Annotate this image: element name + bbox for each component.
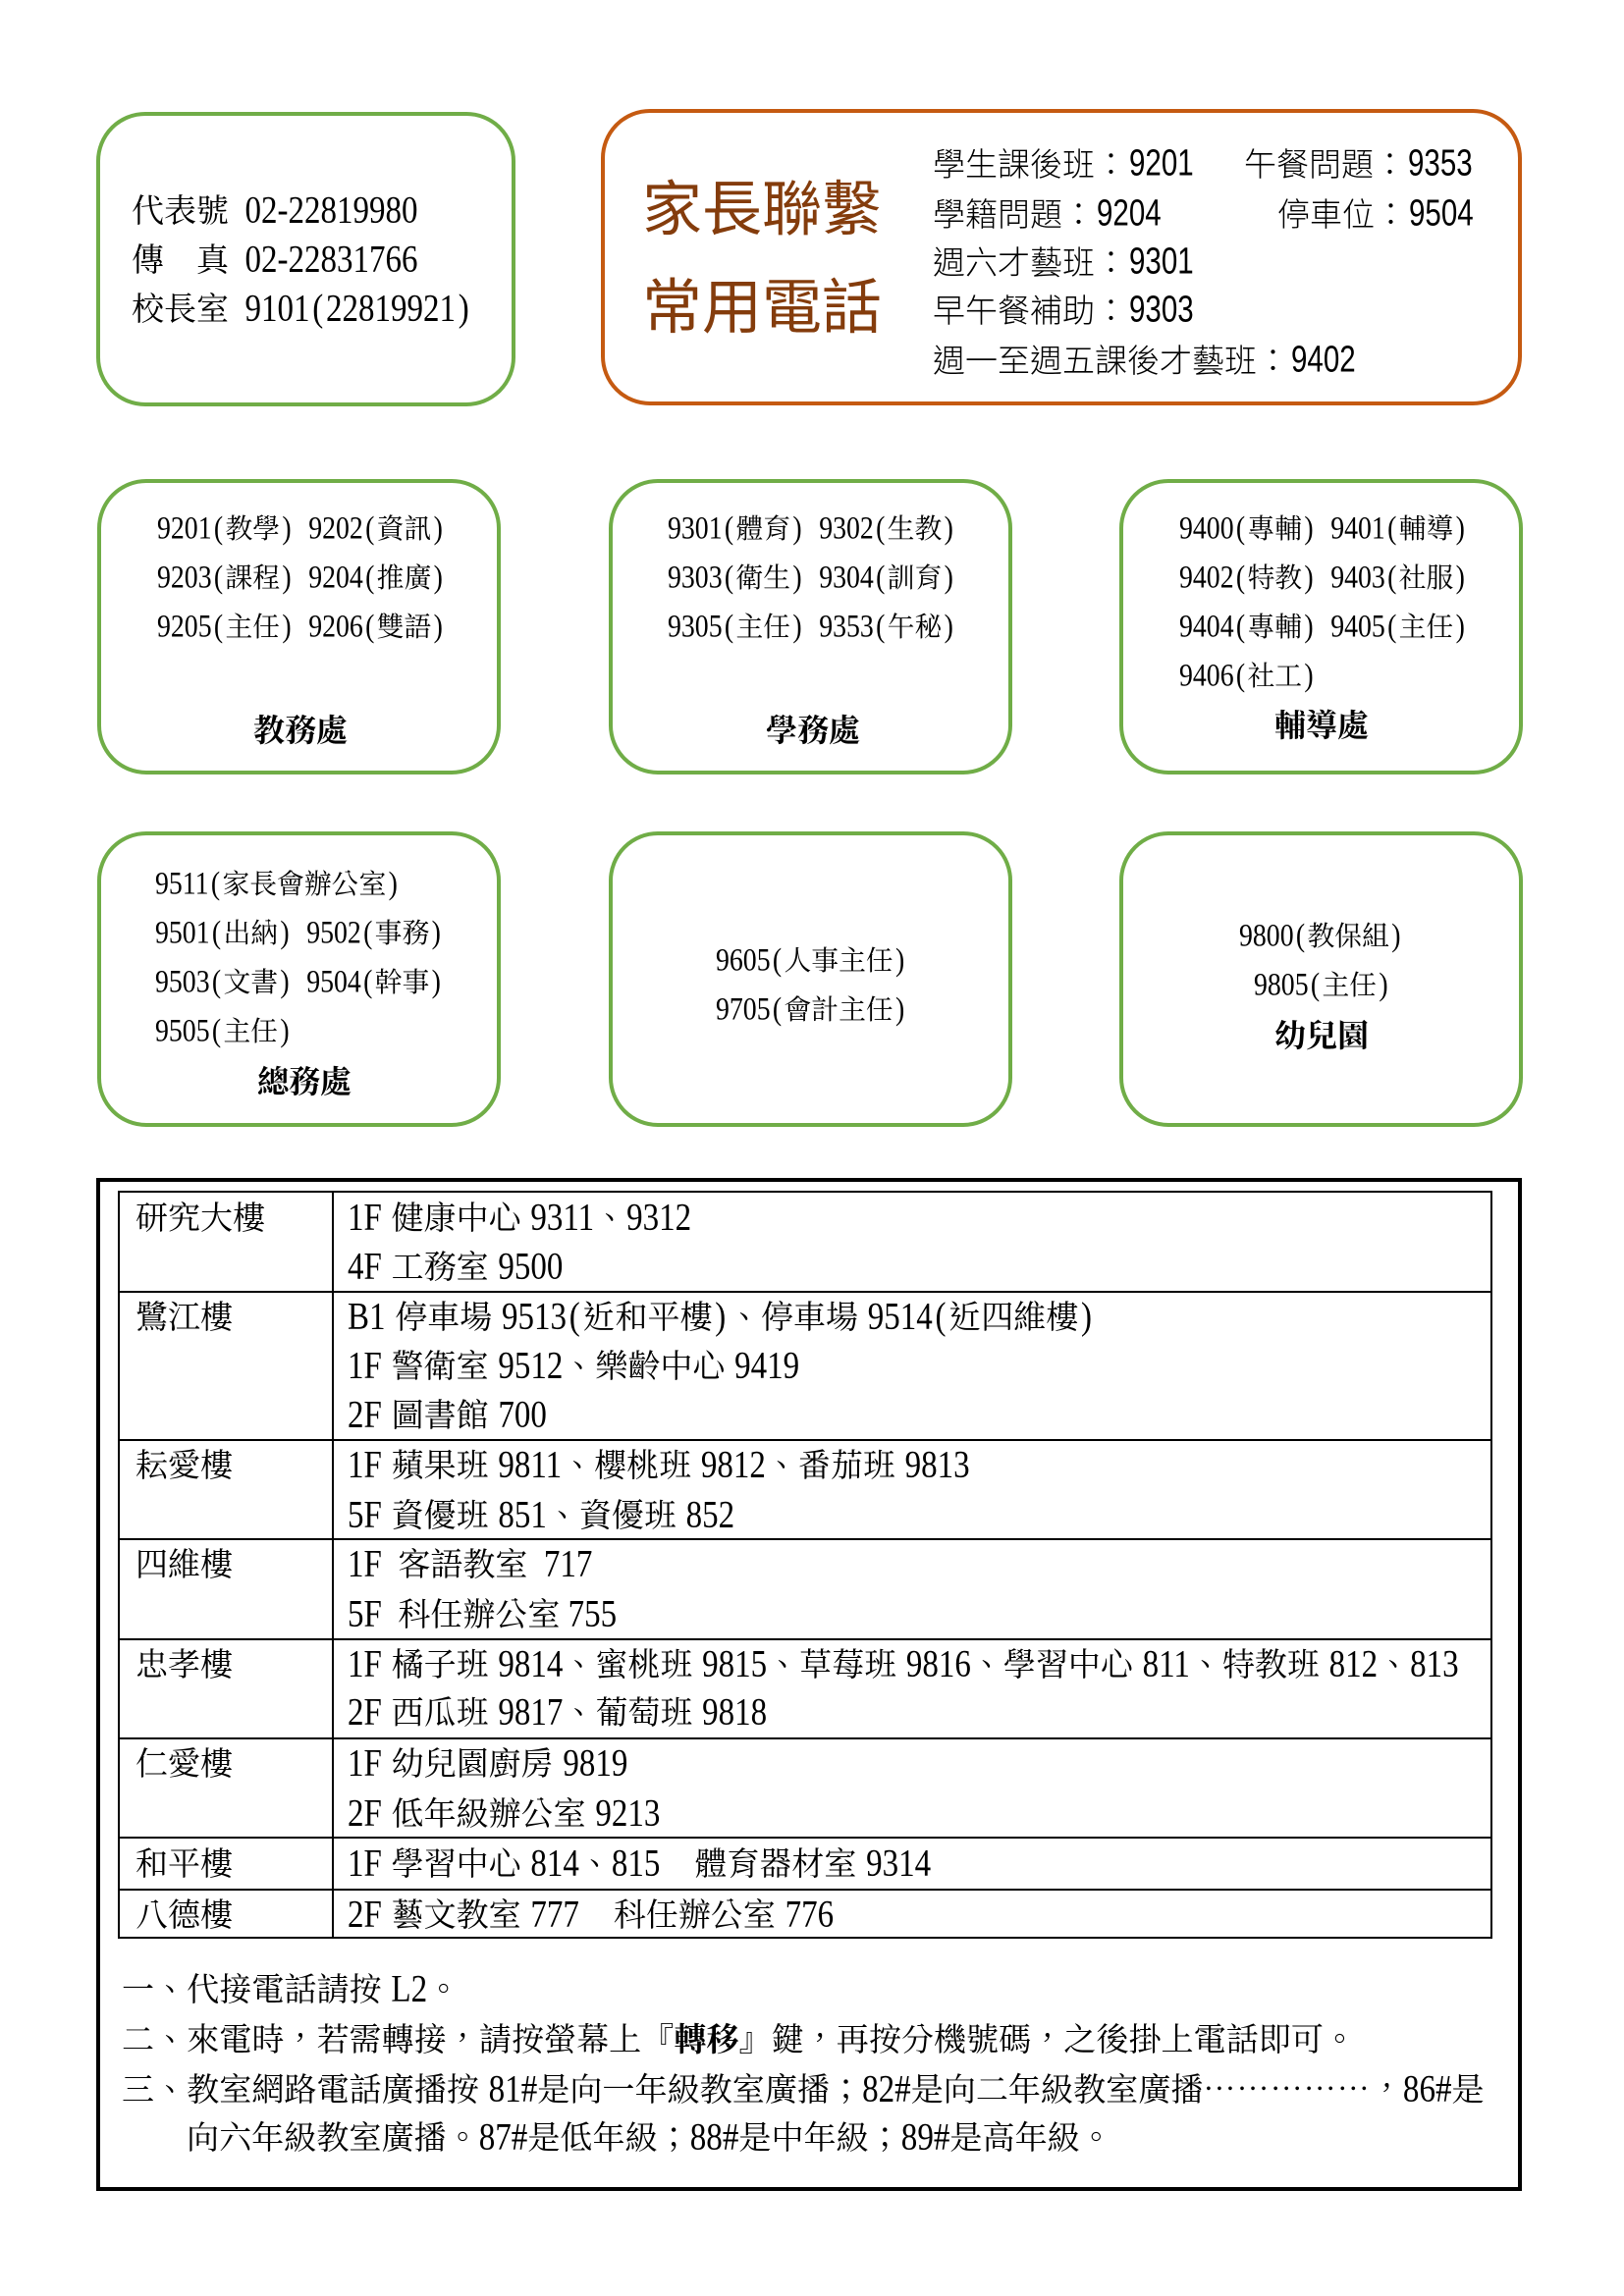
text: extensions line 3: ) bbox=[434, 609, 443, 645]
text: 1F: 1F bbox=[348, 1544, 382, 1585]
text: 4F bbox=[348, 1247, 563, 1288]
row: heping building bbox=[120, 1839, 1490, 1891]
text: extensions line 2 bbox=[1179, 560, 1465, 596]
text: B1: ) bbox=[715, 1297, 726, 1338]
text: extensions line 2: ( bbox=[876, 560, 885, 596]
text: 1F bbox=[348, 1740, 627, 1789]
text: extensions line 4: 9406 bbox=[1179, 658, 1234, 694]
text: saturday arts class bbox=[933, 240, 1194, 283]
text: accounting director: 9705 bbox=[716, 991, 771, 1028]
text: extensions line 1: 9201 bbox=[157, 510, 212, 547]
text: 1F: 學習中心 、 體育器材室 bbox=[392, 1847, 856, 1883]
text: 2F: 9817 bbox=[498, 1692, 563, 1734]
text: 5F: 5F bbox=[348, 1495, 382, 1536]
text: extensions line 1: ( bbox=[725, 510, 733, 547]
text: accounting director bbox=[716, 991, 904, 1028]
text: 1F: 1F bbox=[348, 1346, 382, 1387]
text: childcare team: ( bbox=[1296, 918, 1305, 954]
text: extensions line 1: ) bbox=[389, 866, 398, 902]
text: 1F: 814 bbox=[530, 1843, 579, 1885]
text: extensions line 1: 9302 bbox=[819, 510, 874, 547]
text: extensions line 1: 體育 生教 bbox=[735, 514, 942, 545]
text: extensions line 2: ( bbox=[363, 915, 372, 951]
text: extensions line 1: ( bbox=[365, 510, 374, 547]
text: 5F: 755 bbox=[568, 1594, 617, 1635]
text: extensions line 1: 9511 bbox=[155, 866, 209, 902]
text: extensions line 1: 9301 bbox=[668, 510, 723, 547]
text: 1F: 813 bbox=[1410, 1644, 1459, 1685]
text: principal office: 9101 bbox=[245, 289, 310, 330]
text: extensions line 3: ) bbox=[1456, 609, 1465, 645]
text: extensions line 3: 主任 午秘 bbox=[735, 613, 942, 643]
text: saturday arts class: 週六才藝班： bbox=[933, 244, 1127, 281]
text: 5F: 852 bbox=[686, 1495, 734, 1536]
text: childcare team: 9800 bbox=[1239, 918, 1294, 954]
text: principal office: ) bbox=[459, 289, 469, 330]
text: extensions line 3: 專輔 主任 bbox=[1247, 613, 1453, 643]
text: 2F: 2F bbox=[348, 1692, 382, 1734]
text: extensions line 1: ( bbox=[1236, 510, 1245, 547]
text: extensions line 3 bbox=[1179, 609, 1465, 645]
text: 1F: 1F bbox=[348, 1644, 382, 1685]
heading: counseling: 輔導處 bbox=[1274, 708, 1369, 743]
text: 1F: 幼兒園廚房 bbox=[392, 1747, 554, 1783]
text: personnel director: 人事主任 bbox=[784, 946, 893, 977]
text: 1F: 9819 bbox=[563, 1743, 627, 1785]
heading: common numbers: 常用電話 bbox=[642, 274, 882, 341]
text: extensions line 4: 社工 bbox=[1247, 662, 1302, 692]
text: extensions line 1 bbox=[668, 510, 953, 547]
text: 1F: 812 bbox=[1329, 1644, 1378, 1685]
text: meal subsidy: 9303 bbox=[1129, 289, 1194, 331]
row: bade building bbox=[120, 1891, 1490, 1937]
text: B1: ( bbox=[569, 1297, 580, 1338]
text: note 3 line 1: 82# bbox=[862, 2069, 911, 2110]
text: extensions line 3: ( bbox=[725, 609, 733, 645]
text: fax: 02-22831766 bbox=[245, 240, 418, 281]
text: after-school class: 9201 bbox=[1129, 142, 1194, 185]
text: 2F bbox=[348, 1395, 547, 1436]
text: extensions line 4: 9505 bbox=[155, 1013, 210, 1049]
text: note 3 line 2: 87# bbox=[479, 2117, 527, 2159]
text: main phone bbox=[132, 190, 418, 232]
text: B1: B1 bbox=[348, 1297, 386, 1338]
text: accounting director: ( bbox=[773, 991, 782, 1028]
text: extensions line 4: ( bbox=[1236, 658, 1245, 694]
text: extensions line 1: ) bbox=[434, 510, 443, 547]
row: zhongxiao building bbox=[120, 1640, 1490, 1739]
text: fax: 傳 真 bbox=[132, 243, 229, 279]
text: extensions line 1: 家長會辦公室 bbox=[222, 870, 386, 900]
text: parking: 停車位： bbox=[1277, 196, 1407, 233]
heading: student affairs: 學務處 bbox=[766, 713, 860, 748]
text: 5F bbox=[348, 1594, 617, 1635]
text: 4F: 4F bbox=[348, 1247, 382, 1288]
text: extensions line 3: 9504 bbox=[306, 964, 361, 1000]
text: enrollment issues: 9204 bbox=[1097, 192, 1162, 235]
text: extensions line 2: ) bbox=[1304, 560, 1314, 596]
text: extensions line 1: 9401 bbox=[1330, 510, 1385, 547]
text: extensions line 2: ( bbox=[365, 560, 374, 596]
text: 2F bbox=[348, 1790, 660, 1840]
text: fax bbox=[132, 240, 418, 281]
text: extensions line 3: ) bbox=[432, 964, 441, 1000]
text: personnel director: ) bbox=[895, 942, 904, 979]
text: B1: 9514 bbox=[868, 1297, 933, 1338]
text: 2F: 777 bbox=[530, 1895, 579, 1936]
text: extensions line 4 bbox=[155, 1013, 290, 1049]
text: extensions line 1: ) bbox=[792, 510, 802, 547]
text: extensions line 1: ) bbox=[1304, 510, 1314, 547]
text: 4F: 9500 bbox=[498, 1247, 563, 1288]
text: extensions line 4: ( bbox=[212, 1013, 221, 1049]
text: 1F: 9812 bbox=[701, 1445, 766, 1486]
text: extensions line 3: ) bbox=[282, 609, 292, 645]
text: 1F: 9311 bbox=[530, 1198, 594, 1239]
text: after-school class: 學生課後班： bbox=[933, 146, 1127, 183]
row: research building bbox=[120, 1193, 1490, 1293]
text: extensions line 2 bbox=[155, 915, 441, 951]
text: 5F: 851 bbox=[498, 1495, 547, 1536]
text: 2F: 700 bbox=[498, 1395, 547, 1436]
text: extensions line 3: ( bbox=[212, 964, 221, 1000]
text: extensions line 1: ( bbox=[214, 510, 223, 547]
text: 2F: 藝文教室 科任辦公室 bbox=[392, 1898, 776, 1934]
panel: kindergarten bbox=[1119, 831, 1523, 1127]
text: extensions line 2: ( bbox=[212, 915, 221, 951]
panel: academic affairs bbox=[97, 479, 501, 774]
text: principal office: 22819921 bbox=[326, 289, 456, 330]
label: ren-ai building: 仁愛樓 bbox=[135, 1747, 233, 1783]
text: 2F: 2F bbox=[348, 1895, 382, 1936]
text: weekday arts class: 週一至週五課後才藝班： bbox=[933, 343, 1289, 379]
text: extensions line 2: 9203 bbox=[157, 560, 212, 596]
text: extensions line 3: 主任 雙語 bbox=[225, 613, 431, 643]
text: 1F: 9815 bbox=[702, 1644, 767, 1685]
panel: parent contact numbers bbox=[601, 109, 1522, 405]
text: 1F: 9512 bbox=[498, 1346, 563, 1387]
text: extensions line 4: ) bbox=[1304, 658, 1314, 694]
text: 1F bbox=[348, 1841, 931, 1890]
text: personnel director: ( bbox=[773, 942, 782, 979]
text: B1: ( bbox=[936, 1297, 947, 1338]
text: lunch issues bbox=[1244, 142, 1473, 185]
row: siwei building bbox=[120, 1540, 1490, 1640]
text: extensions line 2: 9204 bbox=[308, 560, 363, 596]
text: main phone: 02-22819980 bbox=[245, 190, 418, 232]
text: extensions line 3: 9305 bbox=[668, 609, 723, 645]
text: saturday arts class: 9301 bbox=[1129, 240, 1194, 283]
text: extensions line 3: 9404 bbox=[1179, 609, 1234, 645]
row: ren-ai building bbox=[120, 1739, 1490, 1839]
text: 1F: 橘子班 、蜜桃班 、草莓班 、學習中心 、特教班 、 bbox=[392, 1648, 1410, 1683]
text: 2F: 西瓜班 、葡萄班 bbox=[392, 1696, 692, 1732]
text: 1F: 9814 bbox=[498, 1644, 563, 1685]
panel: building directory and notes bbox=[96, 1178, 1522, 2191]
text: 2F bbox=[348, 1892, 834, 1941]
text: extensions line 1: 教學 資訊 bbox=[225, 514, 431, 545]
text: extensions line 2: 9403 bbox=[1330, 560, 1385, 596]
text: extensions line 2: ( bbox=[214, 560, 223, 596]
heading: general affairs: 總務處 bbox=[257, 1064, 352, 1099]
text: extensions line 3: ( bbox=[214, 609, 223, 645]
text: extensions line 3: ) bbox=[945, 609, 953, 645]
text: 5F bbox=[348, 1495, 734, 1536]
text: 1F: 9312 bbox=[626, 1198, 691, 1239]
label: zhongxiao building: 忠孝樓 bbox=[135, 1648, 233, 1683]
text: note 3 line 1: 三、教室網路電話廣播按 是向一年級教室廣播； 是向二年級教室廣播……………， 是 bbox=[122, 2064, 1485, 2110]
heading: kindergarten: 幼兒園 bbox=[1274, 1018, 1369, 1053]
text: extensions line 3: ( bbox=[876, 609, 885, 645]
text: extensions line 2: 課程 推廣 bbox=[225, 563, 431, 594]
text: extensions line 3: ( bbox=[1236, 609, 1245, 645]
panel: counseling bbox=[1119, 479, 1523, 774]
text: 1F: 1F bbox=[348, 1198, 382, 1239]
text: personnel director bbox=[716, 942, 904, 979]
text: principal office: 校長室 bbox=[132, 293, 229, 328]
text: meal subsidy bbox=[933, 289, 1194, 331]
text: extensions line 2: ) bbox=[280, 915, 290, 951]
text: extensions line 3: 9206 bbox=[308, 609, 363, 645]
heading: parent contact: 家長聯繫 bbox=[642, 176, 882, 242]
text: 1F bbox=[348, 1198, 691, 1239]
label: heping building: 和平樓 bbox=[135, 1847, 233, 1883]
text: meal subsidy: 早午餐補助： bbox=[933, 293, 1127, 329]
text: director: ) bbox=[1379, 967, 1388, 1003]
text: childcare team: ) bbox=[1391, 918, 1400, 954]
text: extensions line 2: 9304 bbox=[819, 560, 874, 596]
panel: general affairs bbox=[97, 831, 501, 1127]
text: personnel director: 9605 bbox=[716, 942, 771, 979]
text: extensions line 2: ( bbox=[1236, 560, 1245, 596]
text: extensions line 1: 專輔 輔導 bbox=[1247, 514, 1453, 545]
text: lunch issues: 9353 bbox=[1408, 142, 1473, 185]
text: 5F: 科任辦公室 bbox=[398, 1598, 560, 1633]
text: extensions line 1: ( bbox=[876, 510, 885, 547]
text: 4F: 工務室 bbox=[392, 1251, 489, 1286]
panel: personnel and accounting bbox=[609, 831, 1012, 1127]
text: 2F: 2F bbox=[348, 1793, 382, 1835]
text: extensions line 3: 9503 bbox=[155, 964, 210, 1000]
text: extensions line 2: ( bbox=[1387, 560, 1396, 596]
text: note 1: 一、代接電話請按 。 bbox=[122, 1973, 460, 2008]
label: lujiang building: 鷺江樓 bbox=[135, 1301, 233, 1336]
text: extensions line 2: ) bbox=[282, 560, 292, 596]
text: parking: 9504 bbox=[1409, 192, 1474, 235]
text: lunch issues: 午餐問題： bbox=[1244, 146, 1406, 183]
text: 2F: 9818 bbox=[702, 1692, 767, 1734]
text: extensions line 3: 9205 bbox=[157, 609, 212, 645]
text: extensions line 3: ( bbox=[1387, 609, 1396, 645]
text: extensions line 2: 出納 事務 bbox=[223, 919, 429, 949]
text: extensions line 2 bbox=[668, 560, 953, 596]
text: extensions line 3 bbox=[155, 964, 441, 1000]
heading: academic affairs: 教務處 bbox=[253, 713, 348, 748]
text: extensions line 1 bbox=[157, 510, 443, 547]
panel: student affairs bbox=[609, 479, 1012, 774]
text: principal office bbox=[132, 289, 469, 330]
text: weekday arts class: 9402 bbox=[1291, 339, 1356, 381]
text: accounting director: 會計主任 bbox=[784, 995, 893, 1026]
text: 1F: 811 bbox=[1143, 1644, 1190, 1685]
text: director: 9805 bbox=[1254, 967, 1309, 1003]
text: accounting director: ) bbox=[895, 991, 904, 1028]
text: note 3 line 1: 81# bbox=[489, 2069, 537, 2110]
text: extensions line 2: ) bbox=[434, 560, 443, 596]
text: extensions line 3: ( bbox=[365, 609, 374, 645]
text: childcare team: 教保組 bbox=[1307, 922, 1389, 952]
text: 1F: 9419 bbox=[734, 1346, 799, 1387]
text: extensions line 3: 文書 幹事 bbox=[223, 968, 429, 998]
text: main phone: 代表號 bbox=[132, 194, 229, 230]
text: extensions line 4: ) bbox=[280, 1013, 290, 1049]
notes: phone instructions bbox=[122, 1963, 1496, 2162]
text: B1: 9513 bbox=[502, 1297, 567, 1338]
label: yun-ai building: 耘愛樓 bbox=[135, 1449, 233, 1484]
text: extensions line 1: ( bbox=[1387, 510, 1396, 547]
text: parking bbox=[1277, 192, 1474, 235]
text: 1F: 警衛室 、樂齡中心 bbox=[392, 1350, 725, 1385]
text: extensions line 3: ) bbox=[280, 964, 290, 1000]
row: yun-ai building bbox=[120, 1441, 1490, 1540]
text: 5F: 資優班 、資優班 bbox=[392, 1499, 677, 1534]
text: note 3 line 2: 向六年級教室廣播。 是低年級； 是中年級； 是高年級。 bbox=[187, 2121, 1112, 2157]
text: extensions line 2: ( bbox=[725, 560, 733, 596]
text: extensions line 2: 9501 bbox=[155, 915, 210, 951]
text: extensions line 3: 9353 bbox=[819, 609, 874, 645]
text: note 1: L2 bbox=[391, 1969, 427, 2010]
text: 1F bbox=[348, 1346, 799, 1387]
text: 1F: 9811 bbox=[498, 1445, 562, 1486]
text: extensions line 3: ( bbox=[363, 964, 372, 1000]
text: 1F bbox=[348, 1445, 970, 1486]
text: enrollment issues bbox=[933, 192, 1162, 235]
text: 1F: 客語教室 bbox=[398, 1548, 527, 1583]
text: childcare team bbox=[1239, 918, 1400, 954]
text: extensions line 3: 9405 bbox=[1330, 609, 1385, 645]
text: note 3 line 1: 86# bbox=[1403, 2069, 1452, 2110]
text: director: 主任 bbox=[1322, 971, 1377, 1001]
text: director bbox=[1254, 967, 1388, 1003]
label: bade building: 八德樓 bbox=[135, 1898, 233, 1934]
text: 1F: 蘋果班 、櫻桃班 、番茄班 bbox=[392, 1449, 895, 1484]
text: extensions line 2: 特教 社服 bbox=[1247, 563, 1453, 594]
text: extensions line 1: ) bbox=[282, 510, 292, 547]
text: 2F: 2F bbox=[348, 1395, 382, 1436]
text: principal office: ( bbox=[312, 289, 323, 330]
text: extensions line 4: 主任 bbox=[223, 1017, 278, 1047]
table: building extensions bbox=[118, 1191, 1492, 1939]
text: 2F: 776 bbox=[785, 1895, 834, 1936]
text: B1: ) bbox=[1081, 1297, 1092, 1338]
text: extensions line 1: ) bbox=[945, 510, 953, 547]
text: extensions line 1: 9202 bbox=[308, 510, 363, 547]
text: extensions line 2: ) bbox=[792, 560, 802, 596]
text: note 2: 二、來電時，若需轉接，請按螢幕上『轉移』鍵，再按分機號碼，之後掛上電話即可。 bbox=[122, 2023, 1356, 2058]
text: extensions line 2: 衛生 訓育 bbox=[735, 563, 942, 594]
text: enrollment issues: 學籍問題： bbox=[933, 196, 1095, 233]
text: extensions line 1: 9400 bbox=[1179, 510, 1234, 547]
text: extensions line 2: ) bbox=[945, 560, 953, 596]
panel: main numbers bbox=[96, 112, 515, 406]
text: 2F: 9213 bbox=[595, 1793, 660, 1835]
text: 1F: 9816 bbox=[906, 1644, 971, 1685]
text: 1F: 1F bbox=[348, 1445, 382, 1486]
text: B1: 停車場 近和平樓 、停車場 近四維樓 bbox=[395, 1301, 1078, 1336]
text: extensions line 4 bbox=[1179, 658, 1314, 694]
text: extensions line 3: ) bbox=[792, 609, 802, 645]
text: extensions line 2 bbox=[157, 560, 443, 596]
text: extensions line 2: ) bbox=[1456, 560, 1465, 596]
text: extensions line 2: 9303 bbox=[668, 560, 723, 596]
text: extensions line 2: 9402 bbox=[1179, 560, 1234, 596]
text: 1F bbox=[348, 1544, 592, 1585]
text: note 3 line 2: 89# bbox=[901, 2117, 949, 2159]
text: director: ( bbox=[1311, 967, 1320, 1003]
text: extensions line 3 bbox=[668, 609, 953, 645]
text: extensions line 2: 9502 bbox=[306, 915, 361, 951]
text: 1F: 9813 bbox=[905, 1445, 970, 1486]
text: extensions line 2: ) bbox=[432, 915, 441, 951]
text: extensions line 1: ( bbox=[211, 866, 220, 902]
text: 2F bbox=[348, 1689, 767, 1738]
row: lujiang building bbox=[120, 1293, 1490, 1441]
text: 1F: 717 bbox=[544, 1544, 592, 1585]
text: after-school class bbox=[933, 142, 1194, 185]
text: note 3 line 2: 88# bbox=[690, 2117, 738, 2159]
text: 1F: 健康中心 、 bbox=[392, 1201, 626, 1237]
text: extensions line 3 bbox=[157, 609, 443, 645]
text: extensions line 1 bbox=[155, 866, 398, 902]
text: 2F: 圖書館 bbox=[392, 1399, 489, 1434]
text: 5F: 5F bbox=[348, 1594, 382, 1635]
text: 1F: 815 bbox=[612, 1843, 660, 1885]
label: siwei building: 四維樓 bbox=[135, 1548, 233, 1583]
text: 1F: 1F bbox=[348, 1843, 382, 1885]
text: 2F: 低年級辦公室 bbox=[392, 1797, 586, 1833]
text: 1F: 1F bbox=[348, 1743, 382, 1785]
text: extensions line 1 bbox=[1179, 510, 1465, 547]
text: extensions line 1: ) bbox=[1456, 510, 1465, 547]
label: research building: 研究大樓 bbox=[135, 1201, 265, 1237]
text: extensions line 3: ) bbox=[1304, 609, 1314, 645]
text: 1F: 9314 bbox=[866, 1843, 931, 1885]
